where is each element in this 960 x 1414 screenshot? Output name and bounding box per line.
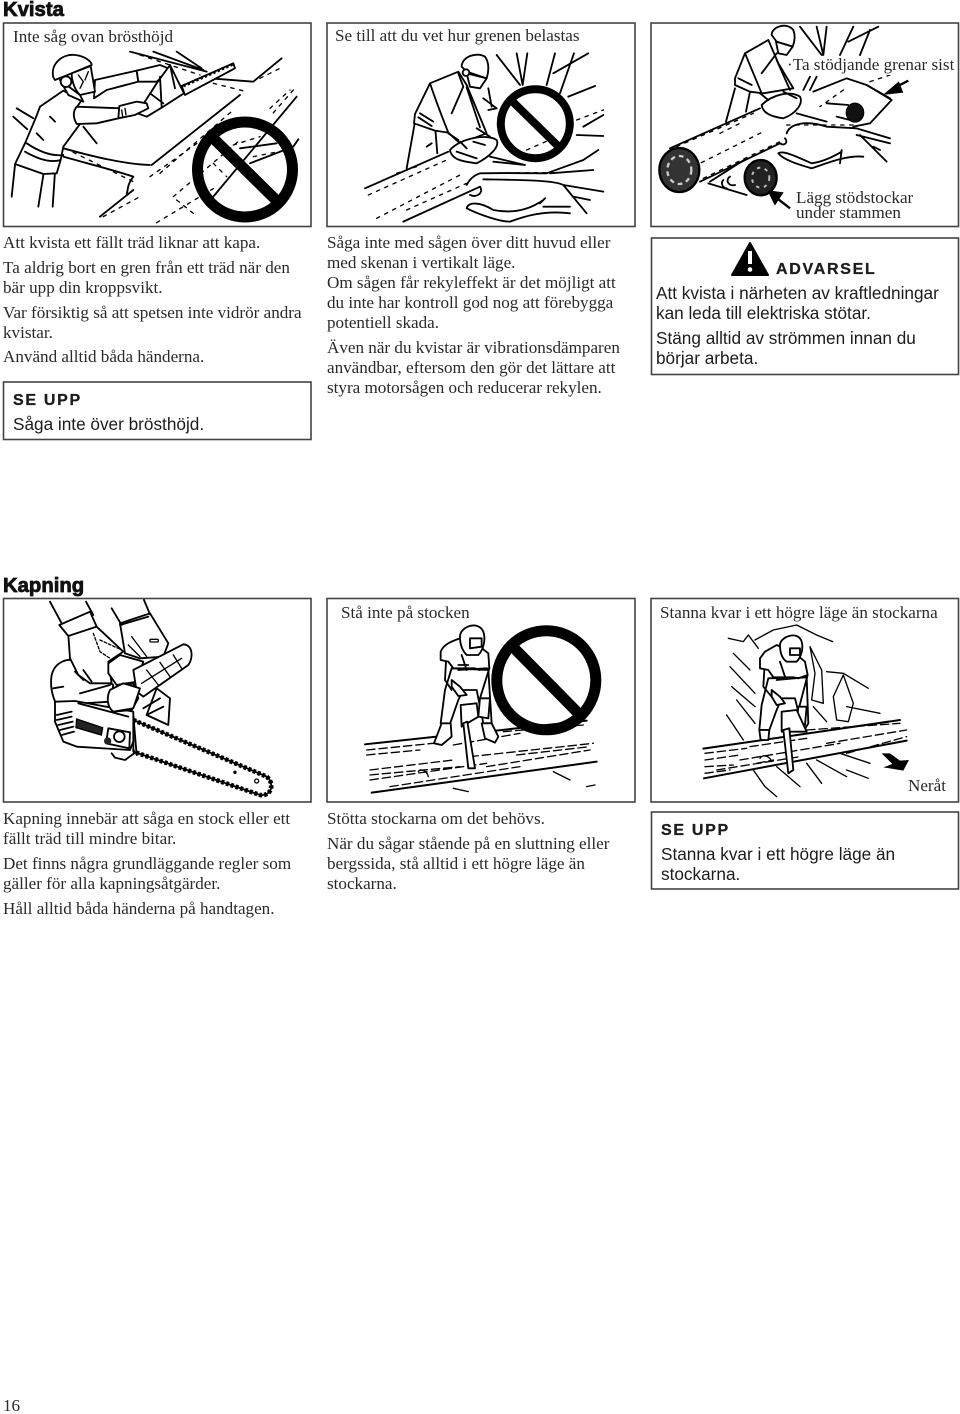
handle and guard [108, 644, 192, 712]
arrow: to supporting branches [887, 81, 908, 93]
worker [12, 55, 235, 207]
text block: såga inte med sågen: Även när du kvistar är vibrationsdämparen [327, 338, 620, 357]
worker [759, 635, 808, 773]
label: lägg stödstockar: Lägg stödstockar [796, 188, 914, 207]
heading: Kapning: Kapning [3, 575, 84, 597]
text block: såga inte med sågen: med skenan i vertikalt läge. [327, 253, 515, 272]
worker [434, 625, 498, 768]
callout text: Att kvista i närheten av kraftledningar [656, 283, 939, 303]
worker [407, 55, 525, 168]
text block: stötta stockarna: Stötta stockarna om det behövs. [327, 809, 545, 828]
caption: Inte såg ovan brösthöjd [13, 27, 173, 46]
callout text: Stäng alltid av strömmen innan du [656, 328, 916, 348]
arrow: to support logs [769, 192, 790, 208]
text block: kapning instructions: Håll alltid båda händerna på handtagen. [3, 899, 274, 918]
rear support log [846, 103, 864, 122]
icon: prohibition sign [497, 631, 596, 730]
label: neråt: Neråt [908, 776, 946, 795]
illustration: hands holding chainsaw [50, 600, 271, 795]
callout text: Stanna kvar i ett högre läge än [661, 844, 895, 864]
callout text: stockarna. [661, 864, 740, 884]
caption: Stå inte på stocken [341, 603, 470, 622]
text block: kvista instructions: Var försiktig så att spetsen inte vidrör andra [3, 303, 302, 322]
caption: Se till att du vet hur grenen belastas [335, 26, 580, 45]
panel: stå inte på stocken [327, 598, 635, 802]
text block: stötta stockarna: bergssida, stå alltid i ett högre läge än [327, 854, 585, 873]
panel: inte såg ovan brösthöjd [4, 23, 311, 226]
text block: stötta stockarna: När du sågar stående på en sluttning eller [327, 834, 610, 853]
callout: se upp [652, 812, 958, 889]
panel: se till att du vet hur grenen belastas [327, 23, 635, 226]
callout text: börjar arbeta. [656, 348, 758, 368]
text block: kapning instructions: fällt träd till mindre bitar. [3, 829, 176, 848]
text block: kvista instructions: kvistar. [3, 323, 53, 342]
callout text [661, 844, 895, 884]
icon: prohibition sign [198, 122, 292, 217]
panel: chainsaw with hands [4, 598, 311, 802]
callout heading: ADVARSEL [776, 261, 876, 278]
text block: såga inte med sågen: användbar, eftersom den gör det lättare att [327, 358, 616, 377]
text block: såga inte med sågen: Såga inte med sågen över ditt huvud eller [327, 233, 611, 252]
icon: warning triangle [732, 243, 768, 275]
illustration: man limbing a supported log [659, 26, 908, 208]
chainsaw body [51, 660, 170, 760]
text block: kvista instructions: Att kvista ett fällt träd liknar att kapa. [3, 233, 260, 252]
text block: kapning instructions: Det finns några grundläggande regler som [3, 854, 292, 873]
callout: se upp [4, 382, 311, 440]
text block: såga inte med sågen: potentiell skada. [327, 313, 439, 332]
illustration: man limbing above chest height [12, 52, 298, 223]
left hand [50, 602, 123, 683]
panel: stanna kvar i ett högre läge [651, 598, 958, 802]
text block: kvista instructions: Ta aldrig bort en gren från ett träd när den [3, 258, 290, 277]
text block: kvista instructions: Använd alltid båda händerna. [3, 347, 204, 366]
label: under stammen: under stammen [796, 203, 901, 222]
callout text: Såga inte över brösthöjd. [13, 414, 204, 434]
text block: stötta stockarna: stockarna. [327, 874, 397, 893]
right hand [112, 600, 168, 658]
text block: såga inte med sågen [327, 233, 620, 397]
text block: kvista instructions [3, 233, 302, 366]
chainsaw bar [133, 720, 271, 795]
illustration: man on slope above the log [703, 625, 909, 797]
log end [659, 148, 699, 192]
callout heading: SE UPP [661, 822, 730, 839]
panel: ta stödjande grenar sist [651, 23, 958, 226]
text block: stötta stockarna [327, 809, 610, 893]
text block: kvista instructions: bär upp din kroppsvikt. [3, 278, 163, 297]
callout heading: SE UPP [13, 392, 82, 409]
support log end [745, 160, 777, 195]
text block: kapning instructions: gäller för alla kapningsåtgärder. [3, 874, 220, 893]
arrow: downhill [882, 753, 909, 771]
callout text: kan leda till elektriska stötar. [656, 303, 871, 323]
icon: prohibition sign [501, 89, 570, 158]
illustration: man standing on log [365, 625, 597, 793]
worker [726, 26, 827, 122]
text block: såga inte med sågen: du inte har kontroll god nog att förebygga [327, 293, 614, 312]
text block: såga inte med sågen: Om sågen får rekyleffekt är det möjligt att [327, 273, 616, 292]
caption: Stanna kvar i ett högre läge än stockarna [660, 603, 938, 622]
text block: kapning instructions: Kapning innebär att såga en stock eller ett [3, 809, 290, 828]
illustration: man cutting branch under load [365, 53, 603, 222]
callout: advarsel [652, 238, 958, 374]
label: ta stödjande grenar sist: ·Ta stödjande grenar sist [787, 55, 955, 74]
callout text [656, 283, 939, 368]
text block: kapning instructions [3, 809, 292, 918]
text block: såga inte med sågen: styra motorsågen och reducerar rekylen. [327, 378, 602, 397]
